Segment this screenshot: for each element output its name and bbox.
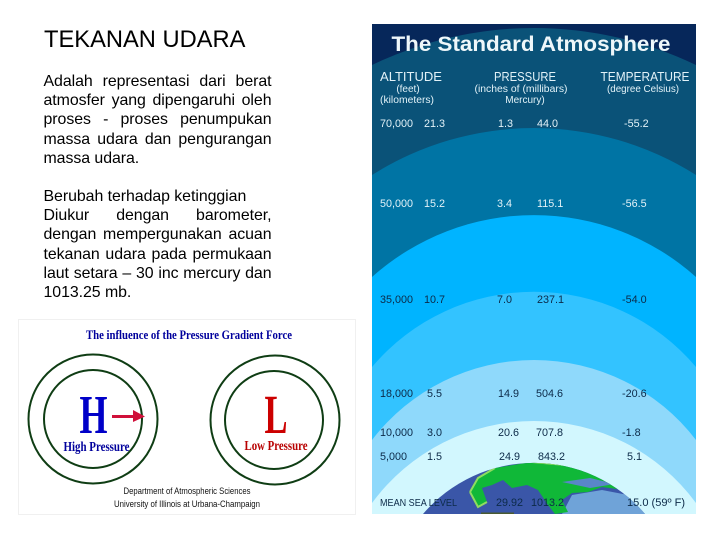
column headers: (feet) <box>396 84 420 95</box>
low pressure rings <box>210 356 340 484</box>
text block: measurement: laut setara ‒ 30 inc mercury dan <box>44 265 272 282</box>
data rows: lower altitudes: 14.9 <box>498 388 519 400</box>
column headers <box>380 70 690 106</box>
data rows: lower altitudes: MEAN SEA LEVEL <box>380 498 457 509</box>
data rows: lower altitudes: 5,000 <box>380 451 407 463</box>
atmosphere layers <box>372 28 696 514</box>
text block: measurement: dengan mempergunakan acuan <box>44 226 272 243</box>
text block: definition: proses - proses penumpukan <box>44 111 272 128</box>
column headers: (degree Celsius) <box>607 84 679 95</box>
data rows: lower altitudes: 10,000 <box>380 427 413 439</box>
data rows: lower altitudes: -1.8 <box>622 427 641 439</box>
data rows: lower altitudes: 15.0 (59º F) <box>627 497 685 509</box>
data rows: upper altitudes: 44.0 <box>537 118 558 130</box>
data rows: lower altitudes <box>380 294 685 509</box>
data rows: lower altitudes: 24.9 <box>499 451 520 463</box>
diagram title: The influence of the Pressure Gradient Force <box>86 327 292 342</box>
data rows: lower altitudes: 707.8 <box>536 427 563 439</box>
column headers: (inches of (millibars) <box>474 84 568 95</box>
credit: Department of Atmospheric Sciences <box>124 486 251 496</box>
data rows: lower altitudes: 237.1 <box>537 294 564 306</box>
data rows: upper altitudes: -55.2 <box>624 118 649 130</box>
data rows: lower altitudes: 10.7 <box>424 294 445 306</box>
letter H: H <box>80 384 108 445</box>
data rows: upper altitudes: 70,000 <box>380 118 413 130</box>
text block: measurement: 1013.25 mb. <box>44 284 131 301</box>
label: low pressure: Low Pressure <box>244 439 308 454</box>
panel: the standard atmosphere chart <box>372 24 696 514</box>
data rows: upper altitudes <box>380 118 649 210</box>
data rows: lower altitudes: 18,000 <box>380 388 413 400</box>
data rows: lower altitudes: -54.0 <box>622 294 647 306</box>
data rows: upper altitudes: 50,000 <box>380 198 413 210</box>
data rows: lower altitudes: 29.92 <box>496 497 523 509</box>
column headers: Mercury) <box>505 95 545 106</box>
data rows: lower altitudes: 5.5 <box>427 388 442 400</box>
data rows: lower altitudes: 35,000 <box>380 294 413 306</box>
column headers: ALTITUDE <box>380 70 442 84</box>
text block: definition: atmosfer yang dipengaruhi oleh <box>44 92 272 109</box>
data rows: lower altitudes: 5.1 <box>627 451 642 463</box>
text block: definition: massa udara dan pengurangan <box>44 131 272 148</box>
text block: definition: Adalah representasi dari berat <box>44 73 272 90</box>
data rows: upper altitudes: 115.1 <box>537 198 563 210</box>
data rows: lower altitudes: 3.0 <box>427 427 442 439</box>
data rows: lower altitudes: 1013.2 <box>531 497 564 509</box>
label: high pressure: High Pressure <box>64 440 130 455</box>
data rows: upper altitudes: 1.3 <box>498 118 513 130</box>
data rows: lower altitudes: 504.6 <box>536 388 563 400</box>
text block: definition <box>44 73 272 167</box>
column headers: TEMPERATURE <box>600 70 690 84</box>
letter L: L <box>264 384 288 445</box>
data rows: upper altitudes: 15.2 <box>424 198 445 210</box>
data rows: lower altitudes: -20.6 <box>622 388 647 400</box>
credit <box>114 486 260 509</box>
data rows: lower altitudes: 843.2 <box>538 451 565 463</box>
column headers: PRESSURE <box>494 70 556 84</box>
arrow: pressure gradient <box>112 410 145 422</box>
data rows: lower altitudes: 1.5 <box>427 451 442 463</box>
data rows: lower altitudes: 20.6 <box>498 427 519 439</box>
text block: measurement <box>44 188 272 301</box>
text block: measurement: Berubah terhadap ketinggian <box>44 188 246 205</box>
data rows: lower altitudes: 7.0 <box>497 294 512 306</box>
data rows: upper altitudes: -56.5 <box>622 198 647 210</box>
column headers: (kilometers) <box>380 95 434 106</box>
data rows: upper altitudes: 3.4 <box>497 198 512 210</box>
text block: measurement: tekanan udara pada permukaan <box>44 246 272 263</box>
text block: measurement: Diukur dengan barometer, <box>44 207 272 224</box>
high pressure rings <box>28 354 158 484</box>
earth globe <box>423 462 645 514</box>
text block: definition: massa udara. <box>44 150 139 167</box>
credit: University of Illinois at Urbana-Champaign <box>114 499 260 509</box>
title: TEKANAN UDARA <box>44 27 245 53</box>
panel: pressure gradient force diagram <box>18 319 356 515</box>
data rows: upper altitudes: 21.3 <box>424 118 445 130</box>
chart title: The Standard Atmosphere <box>392 32 671 56</box>
